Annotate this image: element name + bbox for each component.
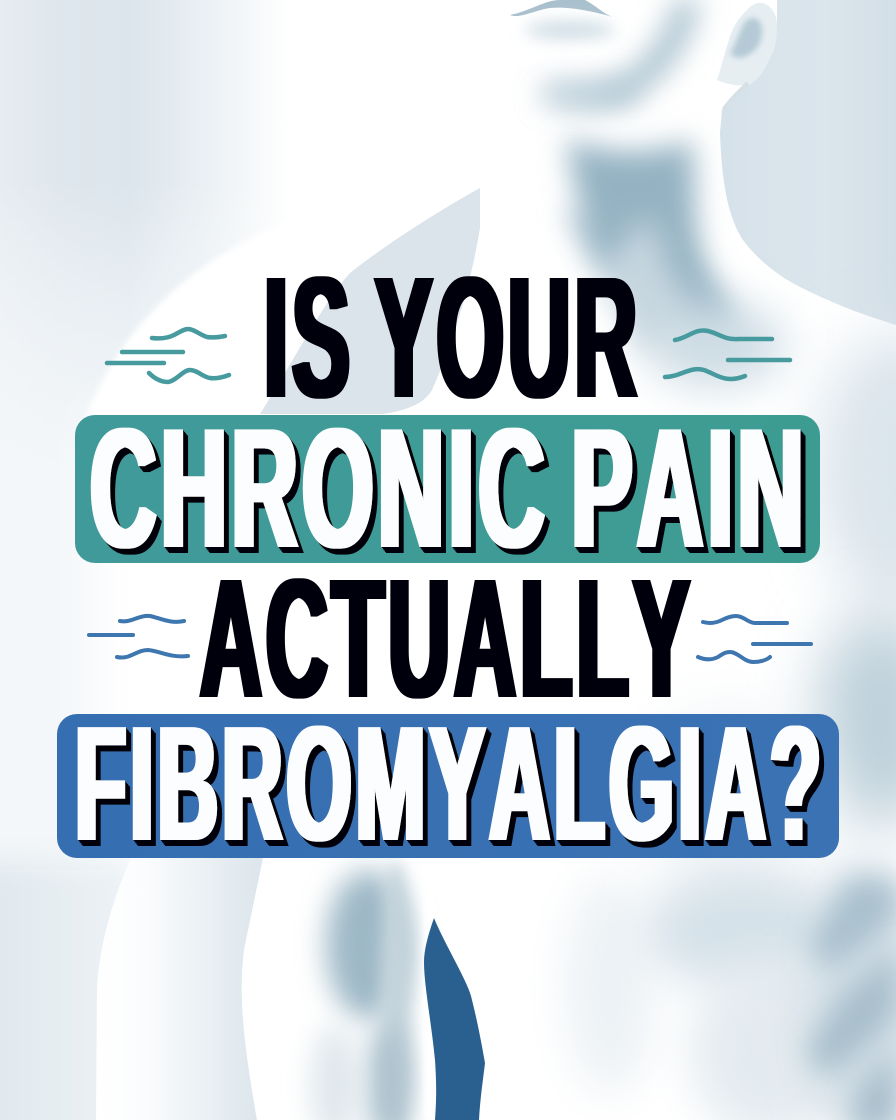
icon: teal motion lines right: [665, 330, 790, 379]
left shoulder soft edge: [85, 215, 300, 420]
face and jaw shading: [510, 0, 700, 107]
left shoulder shadow behind headline: [260, 188, 480, 414]
icon: teal motion lines left: [107, 329, 229, 382]
pill: teal chronic pain: [75, 393, 820, 584]
torso shading: [565, 875, 655, 1095]
left torso white glow: [95, 410, 480, 880]
upper arm: [96, 858, 263, 1120]
inner arm white base: [242, 858, 435, 1120]
teal rounded bar: [75, 415, 820, 563]
chest shading on right: [645, 303, 785, 387]
inner arm shade: [326, 870, 410, 1020]
neck shadow base: [560, 210, 730, 350]
ear: [717, 3, 777, 110]
blue gap between arm and torso: [424, 918, 485, 1120]
neck shadow: [566, 138, 738, 342]
icon: blue motion lines left: [89, 616, 188, 658]
blue rounded bar: [57, 714, 839, 858]
upper left grey backdrop: [0, 0, 300, 860]
upper right backdrop: [720, 0, 896, 325]
icon: blue motion lines right: [698, 616, 811, 662]
left side fade downward: [0, 180, 300, 870]
pill: blue fibromyalgia: [57, 692, 839, 875]
lower left backdrop: [0, 860, 140, 1120]
